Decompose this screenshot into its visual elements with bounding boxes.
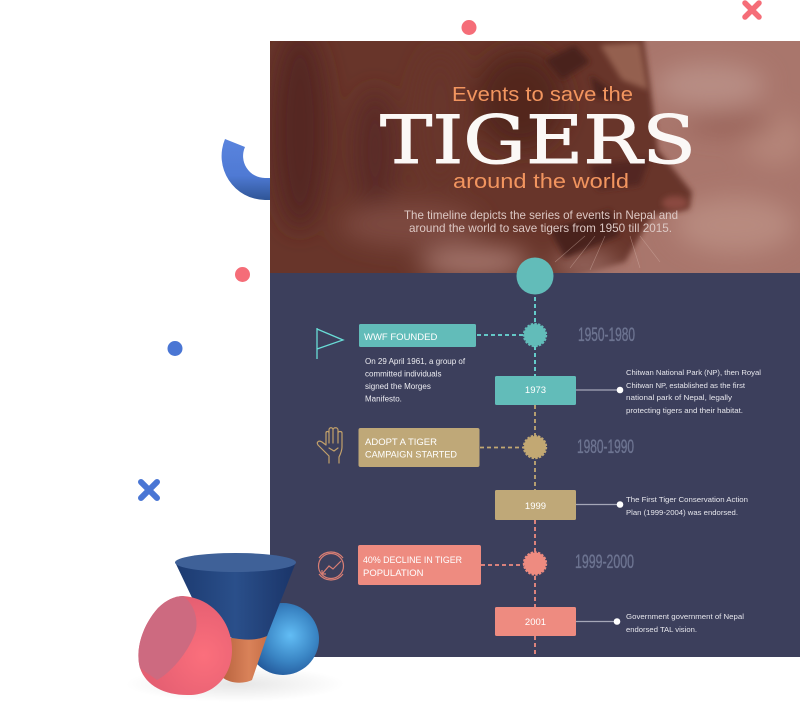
box: 1999 — [495, 490, 576, 520]
text: 1973 description: Chitwan National Park (NP), then Royal — [626, 368, 761, 377]
timeline: top circle — [516, 258, 554, 294]
icon: flag — [317, 328, 343, 359]
label: 1999-2000: 1999-2000 — [575, 552, 634, 573]
text: WWF description — [365, 357, 466, 404]
marker: burst 1980-1990 — [524, 436, 546, 458]
heading: TIGERS: TIGERS — [380, 102, 696, 179]
heading: around the world: around the world — [453, 170, 629, 193]
connector: 2001 — [576, 618, 620, 625]
box: 2001 — [495, 607, 576, 636]
marker: burst 1950-1980 — [524, 324, 546, 346]
decoration: coral dot top — [462, 20, 476, 35]
label: 1950-1980: 1950-1980 — [578, 325, 635, 346]
illustration: 3D shapes — [125, 553, 345, 702]
panel: timeline background — [270, 273, 800, 657]
decoration: coral dot left — [235, 267, 250, 282]
connector: 1999 — [576, 501, 623, 508]
box: 1999: 1999 — [525, 501, 546, 512]
box: 40% decline — [358, 545, 481, 585]
panel: header tiger photo — [262, 30, 800, 280]
connector: 1973 — [576, 387, 623, 393]
text: 1999 description: The First Tiger Conservation Action — [626, 495, 748, 504]
box: WWF founded — [359, 324, 476, 347]
icon: hand — [317, 428, 342, 463]
box: adopt a tiger — [358, 428, 480, 467]
text: 2001 description — [626, 612, 744, 634]
text: 1999 description: Plan (1999-2004) was endorsed. — [626, 508, 738, 517]
box: adopt a tiger: CAMPAIGN STARTED — [365, 450, 457, 460]
icon: declining chart — [318, 552, 344, 580]
text: 1999 description — [626, 495, 748, 517]
box: 1973 — [495, 376, 576, 405]
box: adopt a tiger: ADOPT A TIGER — [365, 437, 437, 448]
decoration: coral cross — [745, 3, 759, 17]
box: 2001: 2001 — [525, 617, 546, 628]
box: 1973: 1973 — [525, 385, 546, 396]
text: header description: The timeline depicts the series of events in Nepal and — [404, 208, 678, 222]
text: header description — [404, 208, 678, 235]
marker: burst 1999-2000 — [524, 552, 546, 575]
decoration: blue cross — [141, 482, 157, 498]
decoration: blue arc — [222, 139, 271, 200]
text: 1973 description: Chitwan NP, established as the first — [626, 381, 746, 390]
text: 2001 description: Government government of Nepal — [626, 612, 744, 621]
text: WWF description: Manifesto. — [365, 394, 402, 404]
box: WWF founded: WWF FOUNDED — [364, 332, 437, 343]
text: 1973 description: protecting tigers and their habitat. — [626, 406, 743, 415]
text: 1973 description: national park of Nepal, legally — [626, 393, 732, 402]
box: 40% decline: POPULATION — [363, 568, 424, 579]
text: WWF description: committed individuals — [365, 370, 441, 378]
timeline: dashed spine — [477, 290, 535, 657]
text: 2001 description: endorsed TAL vision. — [626, 625, 697, 634]
decoration: blue dot — [168, 341, 182, 356]
label: 1980-1990: 1980-1990 — [577, 437, 634, 458]
text: 1973 description — [626, 368, 761, 415]
text: WWF description: signed the Morges — [365, 382, 431, 391]
text: WWF description: On 29 April 1961, a group of — [365, 357, 466, 366]
text: header description: around the world to save tigers from 1950 till 2015. — [409, 221, 672, 235]
heading: events to save the: Events to save the — [452, 83, 633, 106]
box: 40% decline: 40% DECLINE IN TIGER — [363, 555, 462, 566]
